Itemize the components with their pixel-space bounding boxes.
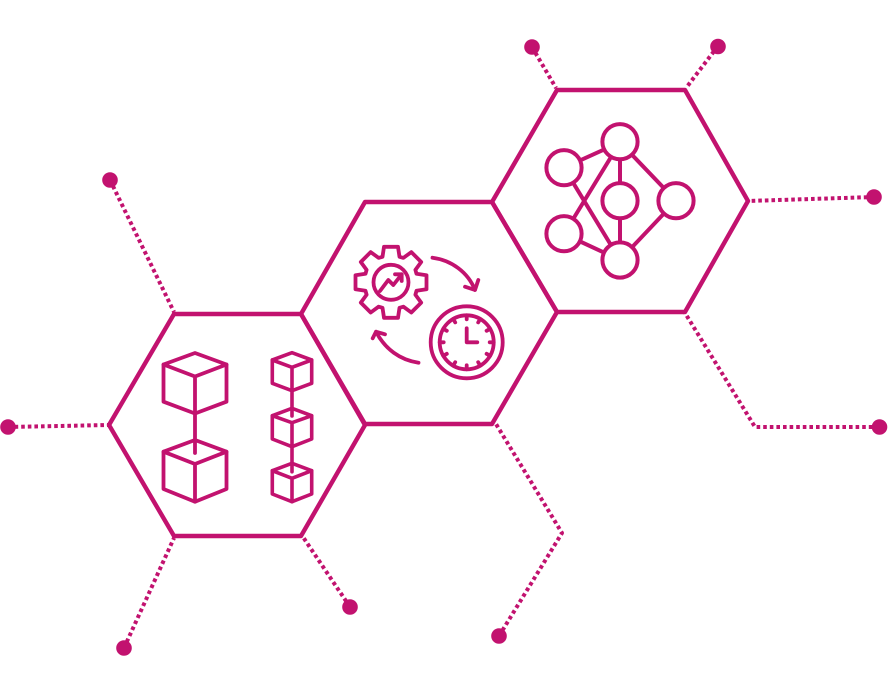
dotted connector: far right node (748, 189, 882, 205)
icon: large linked cubes (164, 353, 226, 502)
arrow: gear to clock (432, 258, 478, 290)
icon: small cube chain (272, 353, 312, 502)
icon: gear with rising chart (356, 247, 426, 318)
icon: clock (431, 306, 503, 378)
arrow: clock to gear (373, 332, 418, 363)
dotted connector: upper left node (102, 172, 174, 312)
icon: neural network (546, 124, 694, 278)
hexagon: neural network (492, 90, 748, 312)
hexagon: process cycle (301, 202, 557, 424)
dotted connector: bottom elbow node (491, 424, 562, 644)
dotted connector: top right node (686, 39, 726, 88)
dotted connector: lower left node (116, 538, 174, 656)
hexagon: blockchain (109, 314, 365, 536)
dotted connector: top left node (524, 39, 556, 88)
dotted connector: right elbow node (685, 313, 887, 435)
dotted connector: far left node (0, 419, 109, 435)
dotted connector: lower middle node (303, 537, 358, 615)
